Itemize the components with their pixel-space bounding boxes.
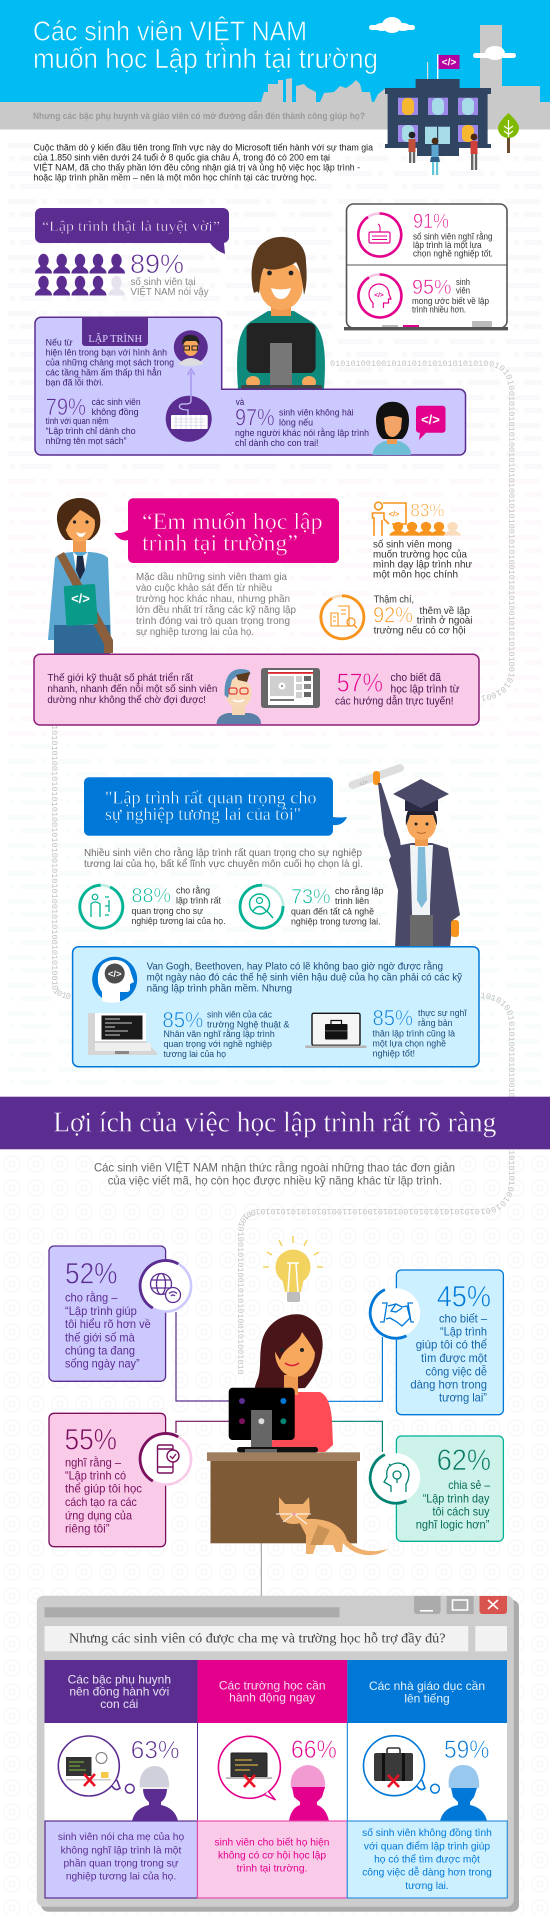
panel: 55% (49, 1413, 191, 1547)
quote bubble: Lập trình thật là tuyệt vời: “Lập trình thật là tuyệt vời” (42, 219, 220, 235)
stat 85% arts: tương lai của họ (164, 1049, 226, 1060)
stat 79% (46, 394, 141, 447)
panel: 52%: tôi hiểu rõ hơn về (65, 1317, 151, 1331)
stat 95%: sinh (456, 277, 470, 288)
stat 83% (372, 500, 472, 580)
icon: handshake (362, 1288, 420, 1347)
title: muốn học Lập trình tại trường (33, 43, 378, 74)
stat 79%: những tên mọt sách” (46, 436, 127, 447)
clouds (369, 17, 516, 60)
column: educators: 59% (444, 1736, 489, 1764)
panel text: không nghĩ lập trình là một (61, 1845, 181, 1856)
panel text: không có cơ hội học lập (218, 1851, 326, 1862)
column: parents: nên đồng hành với (69, 1685, 169, 1699)
quote bubble: career: sự nghiệp tương lai của tôi" (105, 804, 301, 824)
quote bubble: Em muốn học lập trình: “Em muốn học lập (142, 509, 323, 534)
people icons 89% (35, 254, 125, 296)
stat 95%: 95% (412, 275, 452, 299)
binary trails: 1010100101010010101001010100101010010101 (480, 992, 515, 1097)
column: parents: 63% (131, 1736, 180, 1764)
panel: 45% (362, 1270, 503, 1415)
panel: 55%: riêng tôi” (65, 1521, 110, 1535)
column: parents (44, 1660, 198, 1898)
panel text (198, 1821, 347, 1898)
stat 95%: trình nhiều hơn. (412, 305, 466, 316)
icon: books ring (320, 596, 364, 639)
stat 92% (320, 594, 472, 639)
panel: 52%: cho rằng – (65, 1290, 118, 1305)
speech bubble (218, 1736, 280, 1800)
stat 97% (235, 397, 369, 449)
column: schools: Các trường học cần (219, 1678, 326, 1692)
panel: 55%: ứng dụng của (65, 1508, 132, 1522)
panel: 55%: 55% (64, 1423, 117, 1456)
stat 95% (412, 275, 489, 316)
tree (498, 113, 519, 153)
address bar question (44, 1626, 507, 1651)
arrow: keyboard to guy (188, 369, 194, 396)
binary trails: 1010101001010010101010101010100101010010110010101010101010100101010010101001010101001010010101001010 (238, 1150, 514, 1374)
stat 92%: thêm về lập (420, 605, 470, 617)
panel: 52%: “Lập trình giúp (65, 1304, 137, 1318)
stat 91%: 91% (413, 209, 449, 233)
stat 83%: một môn học chính (373, 569, 458, 580)
stat 85% arts: sinh viên của các (207, 1010, 272, 1021)
window buttons (414, 1596, 507, 1614)
panel: 45%: tìm được một (421, 1351, 488, 1365)
intro text: VIỆT NAM, đã cho thấy phần lớn đều công nhận giá trị và ủng hộ việc học lập trình - (34, 162, 360, 173)
panel: 62%: “Lập trình dạy (423, 1491, 489, 1505)
column: parents: con cái (100, 1697, 138, 1711)
boy at computer (237, 237, 325, 390)
panel: online tutorials pink: dường như không thể chờ đợi được! (47, 694, 206, 706)
panel: arts students blue (73, 947, 479, 1067)
title: Các sinh viên VIỆT NAM (33, 16, 307, 47)
section band: benefits heading: Lợi ích của việc học lập trình rất rõ ràng (53, 1108, 496, 1139)
icon: keyboard ring (358, 213, 401, 256)
column: schools: hành động ngay (229, 1691, 315, 1705)
stat 92%: 92% (373, 603, 413, 628)
text: nerd stereotype: Nếu từ (46, 338, 73, 349)
stat 85% arts: trường Nghệ thuật & (207, 1020, 290, 1031)
panel text: phần quan trọng trong sự (63, 1858, 179, 1870)
quote bubble: Em muốn học lập trình: trình tại trường” (142, 531, 298, 556)
text: career paragraph (84, 846, 363, 870)
column: educators: Các nhà giáo dục cần (369, 1679, 485, 1693)
whiteboard panel (344, 204, 508, 330)
stat 85% arts: 85% (162, 1007, 203, 1032)
icon: code speech bubble: </> (421, 412, 440, 427)
binary trails (52, 360, 515, 1374)
panel: 55%: cách tạo ra các (65, 1495, 137, 1509)
panel: 52%: chúng ta đang (65, 1344, 135, 1358)
stat 97%: sinh viên không hài (279, 408, 354, 419)
quote bubble: career (84, 777, 347, 836)
icon: glasses guy (174, 330, 208, 366)
panel text: công việc dễ dàng hơn trong (362, 1866, 492, 1879)
stat 88%: quan trọng cho sự (132, 906, 204, 917)
column: educators: lên tiếng (404, 1691, 450, 1705)
panel: 45%: 45% (437, 1281, 491, 1314)
stat 97%: chỉ dành cho con trai! (235, 438, 318, 449)
icon: search person ring (240, 885, 283, 928)
stat 92%: Thậm chí, (374, 594, 414, 605)
text: benefits intro: của việc viết mã, họ còn học được nhiều kỹ năng khác từ lập trình. (108, 1173, 442, 1187)
text: nerd stereotype: các tầng hầm ấm thấp thì hẳn (46, 367, 162, 379)
stat 73%: quan đến tất cả nghề (291, 907, 374, 918)
stat 91%: số sinh viên nghĩ rằng (413, 231, 492, 242)
stat 57%: 57% (337, 668, 383, 698)
panel: 55%: nghĩ rằng – (65, 1455, 121, 1470)
binary trails: 0101010010010101010101010101010010101001010101010010101010010101001010100101010100101010101001010100101010101010010101 (330, 360, 514, 702)
panel: 45%: dàng hơn trong (410, 1377, 487, 1391)
person silhouette (289, 1765, 329, 1821)
panel text: họ có thể tìm được một (374, 1854, 480, 1866)
graduate (352, 768, 460, 947)
stat 91%: chọn nghề nghiệp tốt. (413, 248, 493, 260)
icon: person ring (79, 885, 123, 928)
stat 73% (240, 885, 383, 928)
stat 97%: 97% (235, 405, 275, 432)
schoolgirl: </> (71, 591, 90, 606)
text: nerd stereotype (46, 338, 174, 388)
stat 89%: 89% (130, 249, 184, 279)
stat 95%: mong ước biết về lập (412, 296, 489, 307)
stat 92%: trường nếu có cơ hội (374, 625, 466, 637)
column: schools (198, 1660, 347, 1898)
stat 88%: cho rằng (176, 885, 210, 896)
stat 85% career (372, 1006, 468, 1059)
title (33, 16, 378, 74)
thought bubble (364, 1736, 439, 1796)
panel: 52%: 52% (65, 1257, 118, 1290)
text: nerd stereotype: của những chàng mọt sách trong (46, 358, 174, 369)
stat 83%: muốn trường học của (373, 548, 467, 560)
panel: online tutorials pink: nhanh, nhanh đến nỗi một số sinh viên (47, 682, 217, 695)
subtitle: Nhưng các bậc phụ huynh và giáo viên có mở đường dẫn đến thành công giúp họ? (33, 111, 365, 122)
panel text: trình tại trường. (237, 1864, 307, 1875)
panel: 62% (362, 1436, 503, 1541)
panel: 62%: nghĩ logic hơn” (416, 1518, 489, 1532)
stat 88%: nghiệp tương lai của họ. (132, 916, 226, 927)
person silhouette (440, 1765, 487, 1821)
stat 79%: “Lập trình chỉ dành cho (46, 426, 136, 437)
text: nerd stereotype: hiện lên trong bạn với hình ảnh (46, 348, 167, 359)
stat 97%: lòng nếu (279, 418, 313, 429)
text: survey paragraph: trường học khác nhau, nhưng phần (136, 593, 290, 605)
stat 85% career: rằng bản (418, 1018, 452, 1029)
panel: 52% (49, 1246, 191, 1381)
thought bubble (58, 1736, 134, 1796)
panel: 62%: 62% (437, 1444, 491, 1477)
panel: browser window (37, 1596, 519, 1912)
stat 85% career: 85% (372, 1006, 413, 1031)
stat 85% career: một lựa chọn nghề (372, 1038, 446, 1049)
cat (276, 1497, 388, 1555)
stat 79%: không đồng (92, 407, 139, 418)
text: survey paragraph: Mặc dầu những sinh viên tham gia (136, 571, 287, 583)
tab heading (82, 317, 148, 346)
panel: 45%: tương lai” (439, 1391, 487, 1405)
panel: online tutorials pink (34, 654, 479, 725)
icon: laptop with code (88, 1013, 157, 1055)
stat 79%: tình với quan niệm (46, 416, 109, 427)
panel: 45%: “Lập trình (440, 1325, 487, 1339)
stat 57%: các hướng dẫn trực tuyến! (335, 695, 454, 708)
stat 89%: số sinh viên tại (130, 276, 196, 288)
stat 95%: viên (456, 285, 470, 296)
stat 79%: 79% (46, 394, 86, 421)
panel: 45%: cho biết – (439, 1311, 487, 1325)
stat 89% (130, 249, 209, 298)
connector dots (239, 1398, 286, 1424)
icon: globe wifi (131, 1251, 191, 1312)
panel: arts students blue: Van Gogh, Beethoven, hay Plato có lẽ không bao giờ ngờ được rằng (147, 960, 443, 973)
intro text: của 1.850 sinh viên dưới 24 tuổi ở 8 quốc gia châu Á, trong đó có 200 em tại (34, 152, 330, 163)
icon: teacher at board: </> (389, 510, 400, 518)
icon: head ring: </> (374, 292, 384, 299)
stat 92%: trình ở ngoài (417, 615, 472, 627)
school building (385, 54, 491, 156)
panel text: sinh viên nói cha mẹ của họ (58, 1831, 184, 1843)
icon: laptop with briefcase (305, 1013, 367, 1048)
icon: coding head: </> (108, 969, 122, 980)
skyline (261, 25, 540, 102)
text: survey paragraph (136, 571, 296, 638)
stat 91% (413, 209, 493, 260)
icon: guy with glasses (216, 669, 261, 724)
address bar question: Nhưng các sinh viên có được cha mẹ và trường học hỗ trợ đầy đủ? (69, 1631, 446, 1646)
intro text: Cuộc thăm dò ý kiến đầu tiên trong lĩnh vực này do Microsoft tiến hành với sự tham gia (34, 143, 374, 154)
desk (207, 1452, 360, 1543)
stat 73%: trình liên (335, 896, 369, 907)
stat 88%: lập trình rất (176, 895, 221, 906)
panel: 62%: chia sẻ – (448, 1478, 490, 1492)
stat 85% career: thực sự nghĩ (418, 1008, 468, 1019)
stat 57% (335, 668, 460, 708)
stat 88% (79, 885, 226, 928)
stat 91%: lập trình là một lựa (413, 240, 482, 251)
panel: 45%: công việc dễ (426, 1363, 487, 1378)
icon: head ring (358, 274, 401, 318)
icon: code speech bubble (416, 406, 446, 440)
panel text: sinh viên cho biết họ hiện (215, 1836, 329, 1848)
panel text (347, 1821, 507, 1898)
intro text: hoặc lập trình phần mềm – nên là một môn học chính tại các trường học. (34, 172, 317, 183)
text: career paragraph: Nhiều sinh viên cho rằng lập trình rất quan trọng cho sự nghiệp (84, 846, 362, 859)
column: educators (347, 1660, 507, 1898)
panel: LẬP TRÌNH lilac (35, 317, 466, 455)
text: survey paragraph: lớn đều nhất trí rằng các kỹ năng lập (136, 603, 296, 616)
stat 97%: và (236, 397, 245, 408)
person silhouette (132, 1766, 178, 1821)
intro text (34, 143, 374, 183)
text: survey paragraph: sự nghiệp tương lai của họ. (136, 626, 254, 638)
stat 85% career: nghiệp tốt! (372, 1048, 415, 1059)
icon: video tablet (261, 668, 320, 708)
tab heading: LẬP TRÌNH (88, 333, 142, 345)
panel: arts students blue: một ngày nào đó các thế hệ sinh viên hậu duệ của họ cần phải có các kỹ (147, 972, 463, 984)
text: survey paragraph: trình đóng vai trò quan trọng trong (136, 616, 290, 627)
panel: 55%: “Lập trình có (65, 1469, 126, 1483)
panel: 52%: thế giới số mà (65, 1330, 135, 1344)
text: career paragraph: tương lai của họ, bất kể lĩnh vực chuyên môn cuối họ chọn là gì. (84, 858, 363, 870)
stat 83%: số sinh viên mong (373, 538, 452, 550)
column middles (44, 1723, 507, 1821)
panel text: tương lai. (405, 1881, 449, 1892)
stat 85% career: thân lập trình cũng là (372, 1028, 456, 1039)
connector lines (176, 1312, 382, 1596)
panel: 55%: thể giúp tôi học (65, 1482, 142, 1496)
panel text: số sinh viên không đồng tình (362, 1827, 492, 1839)
quote bubble: Em muốn học lập trình (114, 498, 339, 563)
text: benefits intro: Các sinh viên VIỆT NAM nhận thức rằng ngoài những thao tác đơn giản (94, 1160, 455, 1175)
text: survey paragraph: vào cuộc khảo sát đến từ nhiều (136, 582, 272, 594)
icon: idea head (362, 1453, 420, 1512)
schoolgirl (48, 498, 113, 654)
panel: online tutorials pink: Thế giới kỹ thuật số phát triển rất (47, 672, 193, 684)
stat 83%: 83% (410, 500, 444, 521)
stat 73%: cho rằng lập (335, 886, 383, 897)
icon: keyboard (166, 396, 212, 442)
stat 85% arts: Nhân văn nghĩ rằng lập trình (164, 1029, 275, 1040)
panel text: với quan điểm lập trình giúp (364, 1840, 490, 1852)
panel: arts students blue: năng lập trình phần mềm. Nhưng (147, 983, 292, 995)
quote bubble: career: "Lập trình rất quan trọng cho (105, 787, 316, 807)
stat 57%: học lập trình từ (390, 684, 460, 696)
panel: 45%: giúp tôi có thể (416, 1338, 487, 1352)
text: benefits intro (94, 1160, 455, 1187)
text: nerd stereotype: bạn đã lỗi thời. (46, 377, 104, 388)
stat 88%: 88% (132, 885, 171, 908)
school building: </> (442, 58, 456, 68)
panel: 52%: sống ngày nay” (65, 1357, 140, 1371)
column: parents: Các bậc phụ huynh (68, 1672, 171, 1686)
icon: lightbulb (263, 1236, 323, 1302)
icon: phone check (131, 1424, 191, 1484)
stat 85% arts (162, 1007, 290, 1060)
title bar (44, 1607, 340, 1617)
woman at desk (229, 1314, 333, 1453)
panel: 62%: tôi cách suy (432, 1504, 490, 1518)
quote bubble: Lập trình thật là tuyệt vời (35, 208, 229, 254)
icon: coding head (92, 957, 137, 1003)
stat 89%: VIỆT NAM nói vậy (130, 285, 209, 298)
section band: benefits heading (0, 1097, 550, 1149)
stat 85% arts: quan trọng với nghề nghiệp (164, 1039, 272, 1050)
graduate: </> (359, 779, 369, 788)
stat 73%: 73% (291, 885, 330, 908)
stat 57%: cho biết đã (390, 672, 442, 684)
students (408, 132, 478, 175)
stat 97%: nghe người khác nói rằng lập trình (235, 428, 369, 439)
stat 73%: nghiệp trong tương lai. (291, 917, 381, 928)
stat 79%: các sinh viên (92, 397, 141, 408)
panel text: nghiệp tương lai của họ. (66, 1871, 176, 1883)
icon: girl (372, 402, 411, 455)
stat 83%: mình dạy lập trình như (373, 559, 472, 570)
panel text (45, 1821, 198, 1898)
header band (0, 0, 550, 130)
column: schools: 66% (291, 1736, 337, 1764)
